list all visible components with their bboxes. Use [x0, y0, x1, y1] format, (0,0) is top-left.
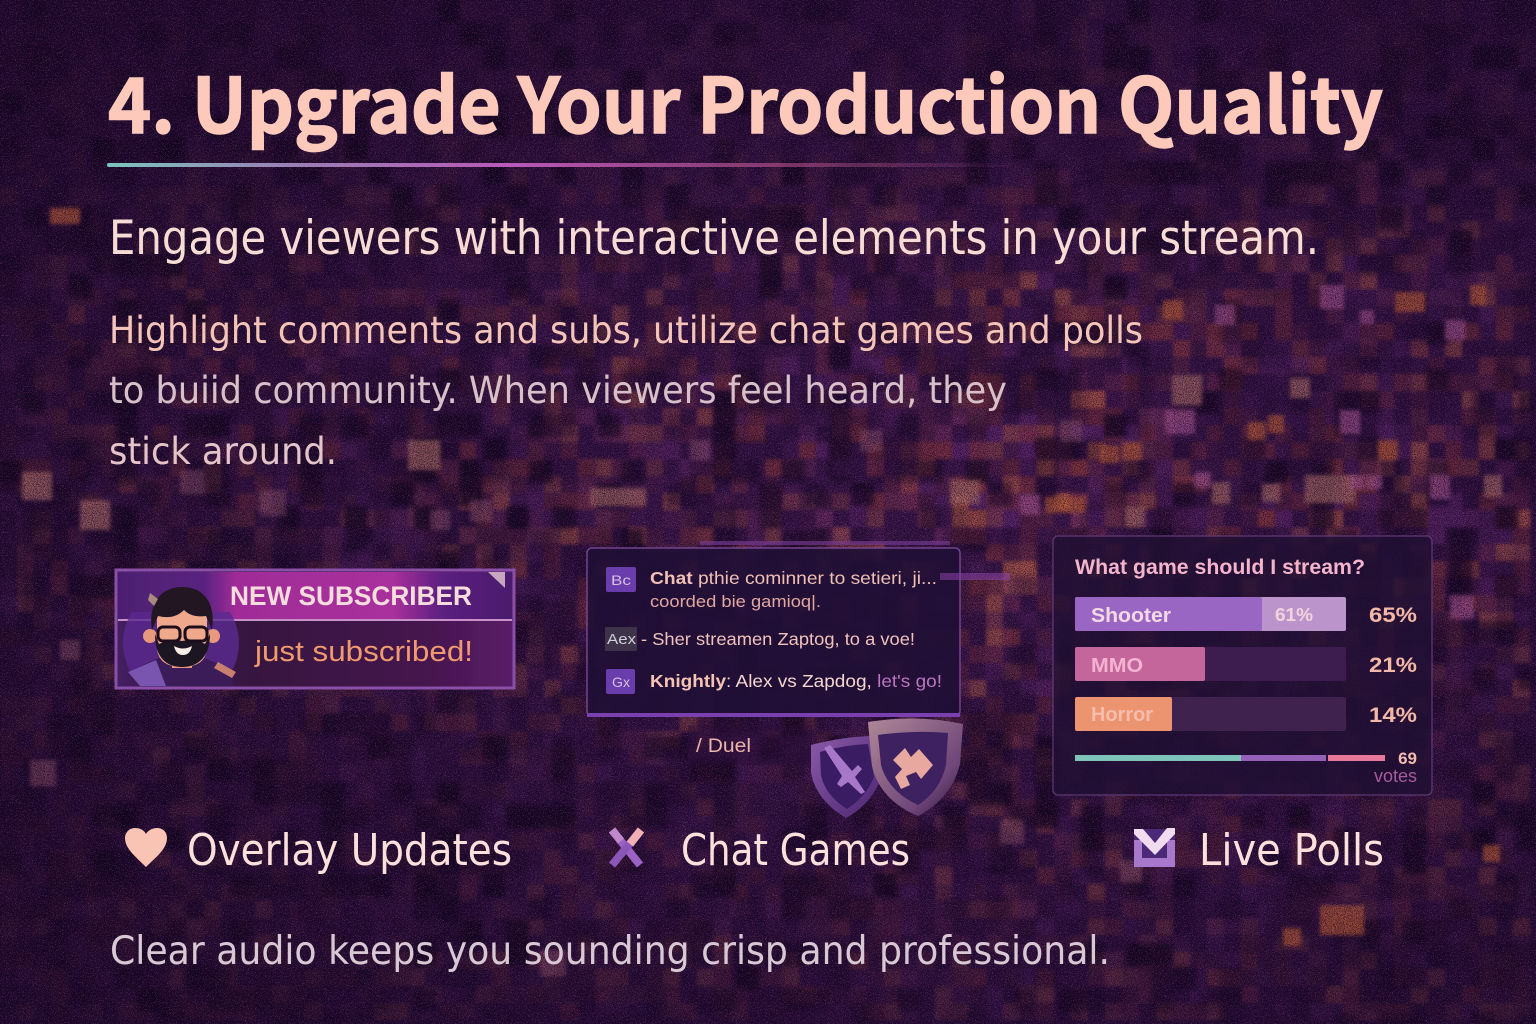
body text [109, 309, 1143, 473]
bar: Shooter [1075, 597, 1417, 631]
chat row 3 [606, 669, 942, 694]
label: Chat Games: Chat Games [681, 825, 910, 876]
subtitle: Engage viewers with interactive elements in your stream. [109, 211, 1319, 266]
vote total bar [1075, 749, 1417, 786]
bar: Horror [1075, 697, 1417, 731]
title: 4. Upgrade Your Production Quality [108, 45, 1383, 155]
bar: Shooter: 65% [1369, 604, 1417, 627]
icon: sword shield [811, 736, 882, 818]
icon: arrows shield [868, 718, 963, 816]
poll question: What game should I stream? [1075, 556, 1365, 579]
footer text: Clear audio keeps you sounding crisp and professional. [110, 929, 1110, 974]
chat row 2: Aex [607, 631, 637, 648]
title underline [107, 163, 1017, 167]
icon: crossed swords X [612, 830, 641, 865]
vote total bar: votes [1374, 766, 1417, 786]
body text: stick around. [109, 430, 337, 473]
chat row 3: Gx [612, 674, 630, 690]
bar: MMO [1075, 647, 1417, 681]
bar: Shooter: 61% [1275, 605, 1313, 625]
chat row 1: Bc [611, 572, 631, 588]
heading: NEW SUBSCRIBER [230, 581, 472, 611]
icon: ballot check [1134, 828, 1175, 867]
message: just subscribed! [254, 636, 473, 668]
panel: new subscriber overlay [116, 570, 514, 701]
body text: to buiid community. When viewers feel heard, they [109, 369, 1007, 412]
chat row 2: - Sher streamen Zaptog, to a voe! [641, 629, 915, 649]
corner tag [488, 572, 505, 588]
chat row 3: Knightly : Alex vs Zapdog, let's go! [650, 671, 942, 691]
duel command [688, 725, 812, 765]
chat row 1: coorded bie gamioq|. [650, 592, 821, 611]
icon: heart [125, 828, 167, 867]
panel: live poll [1053, 536, 1432, 795]
bar: Shooter: Shooter [1091, 605, 1171, 627]
chat row 1 [606, 567, 937, 611]
bar: MMO: 21% [1369, 654, 1417, 677]
bar: Horror: 14% [1369, 704, 1417, 727]
avatar [123, 587, 239, 686]
label: Live Polls: Live Polls [1199, 825, 1384, 876]
panel: chat [587, 541, 1010, 717]
bar: Horror: Horror [1091, 704, 1153, 726]
vote total bar: 69 [1398, 749, 1417, 768]
bar: MMO: MMO [1091, 655, 1143, 677]
duel command: / Duel [696, 736, 751, 757]
body text: Highlight comments and subs, utilize chat games and polls [109, 309, 1143, 352]
label: Overlay Updates: Overlay Updates [187, 825, 512, 876]
chat row 1: Chat pthie cominner to setieri, ji... [650, 568, 937, 588]
